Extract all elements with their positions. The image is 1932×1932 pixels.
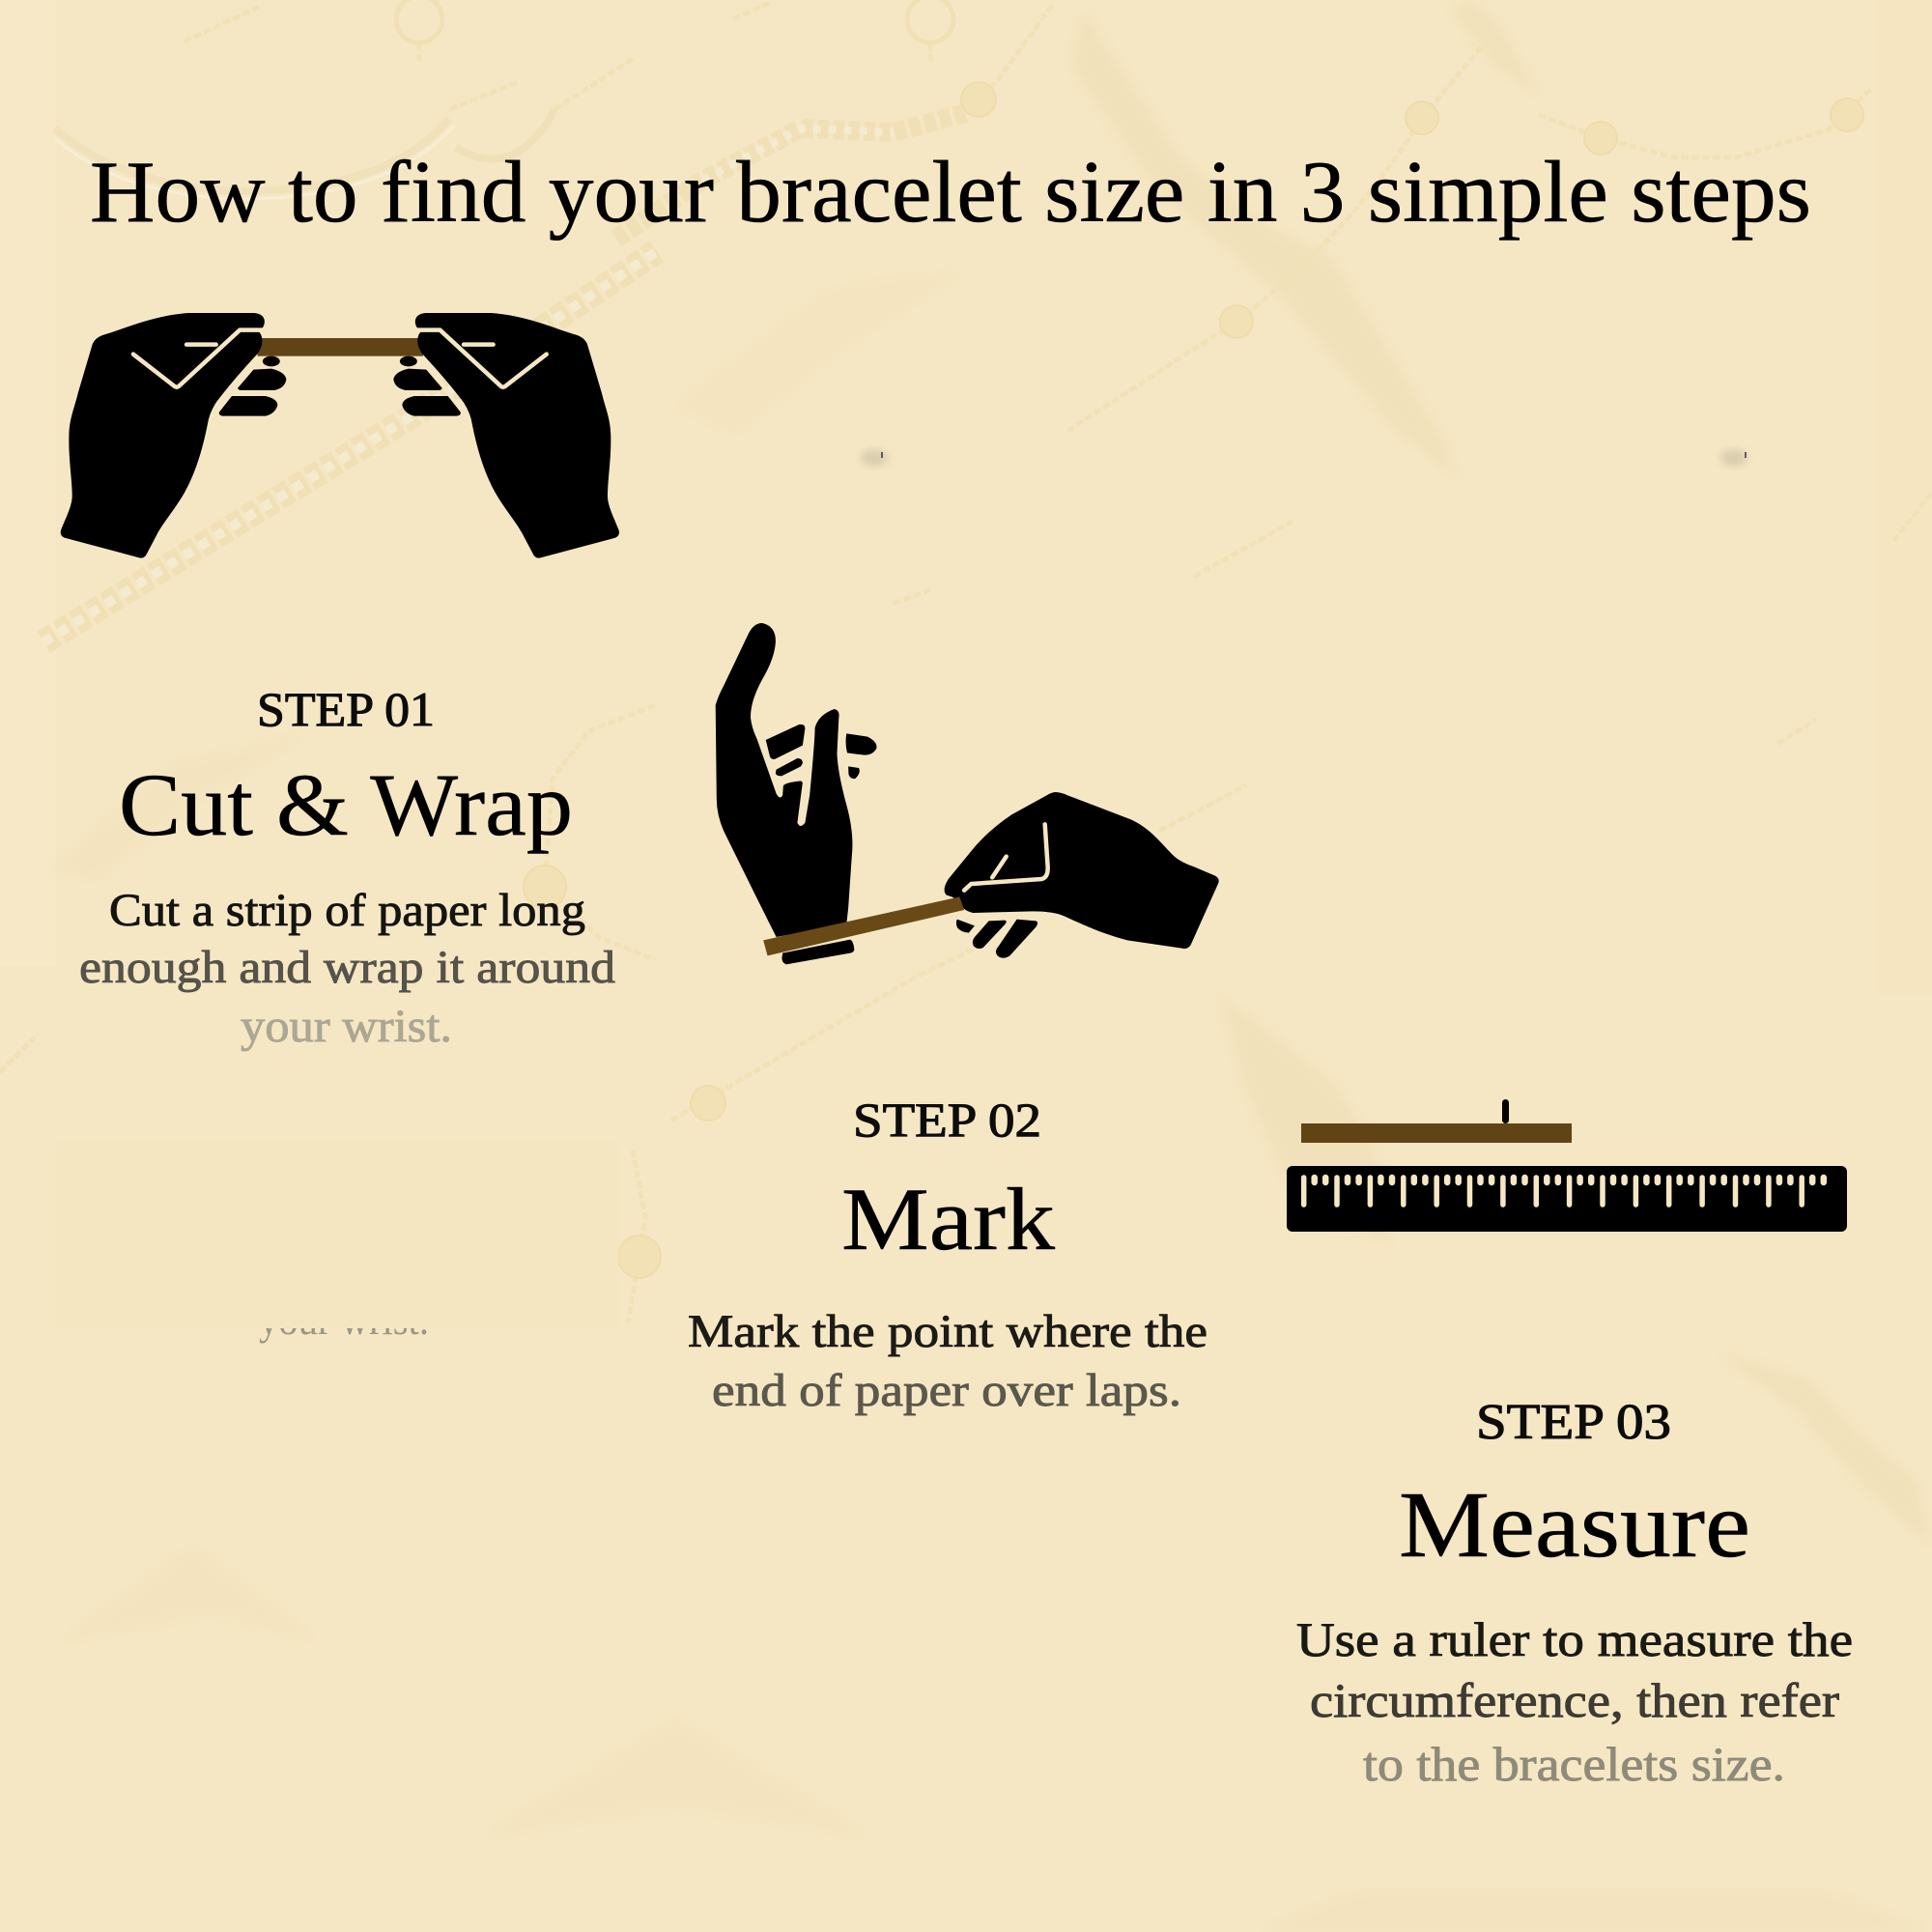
left hand	[61, 313, 286, 558]
pen mark	[1502, 1099, 1509, 1123]
clipped ghost line of text: your wrist.	[259, 1296, 429, 1344]
step 02 heading: Mark	[841, 1170, 1055, 1268]
step 03 description: circumference, then refer	[1310, 1673, 1839, 1727]
icon: hand marking paper strip around wrist	[716, 623, 1219, 964]
step 02 description: end of paper over laps.	[712, 1365, 1181, 1416]
step 01 description: your wrist.	[241, 1001, 452, 1052]
step 03 heading: Measure	[1399, 1473, 1750, 1577]
step 01 description: enough and wrap it around	[79, 942, 615, 993]
right hand	[393, 313, 619, 558]
step 03 label: STEP 03	[1476, 1395, 1671, 1450]
paper strip	[1301, 1123, 1572, 1143]
paper strip	[258, 338, 423, 356]
step 01 description: Cut a strip of paper long	[109, 885, 585, 936]
wrist hand	[716, 623, 876, 964]
step 03 text block	[1296, 1395, 1853, 1791]
step 03 description: to the bracelets size.	[1363, 1737, 1785, 1791]
step 01 text block	[79, 682, 615, 1052]
step 01 heading: Cut & Wrap	[119, 755, 573, 854]
ruler ticks	[1304, 1178, 1824, 1205]
step 02 description: Mark the point where the	[688, 1306, 1208, 1357]
paper strip	[763, 896, 964, 955]
step 02 text block	[688, 1093, 1208, 1416]
step 01 label: STEP 01	[257, 682, 435, 736]
title: How to find your bracelet size in 3 simple steps	[90, 143, 1811, 241]
step 01 description	[79, 885, 615, 1052]
icon: two hands holding a paper strip	[61, 313, 619, 558]
step 02 label: STEP 02	[853, 1093, 1041, 1147]
step 02 description	[688, 1306, 1208, 1416]
icon: marked strip above ruler	[1287, 1099, 1847, 1232]
step 03 description: Use a ruler to measure the	[1296, 1612, 1853, 1666]
holding hand	[945, 792, 1219, 958]
step 03 description	[1296, 1612, 1853, 1791]
ruler body	[1287, 1166, 1847, 1232]
